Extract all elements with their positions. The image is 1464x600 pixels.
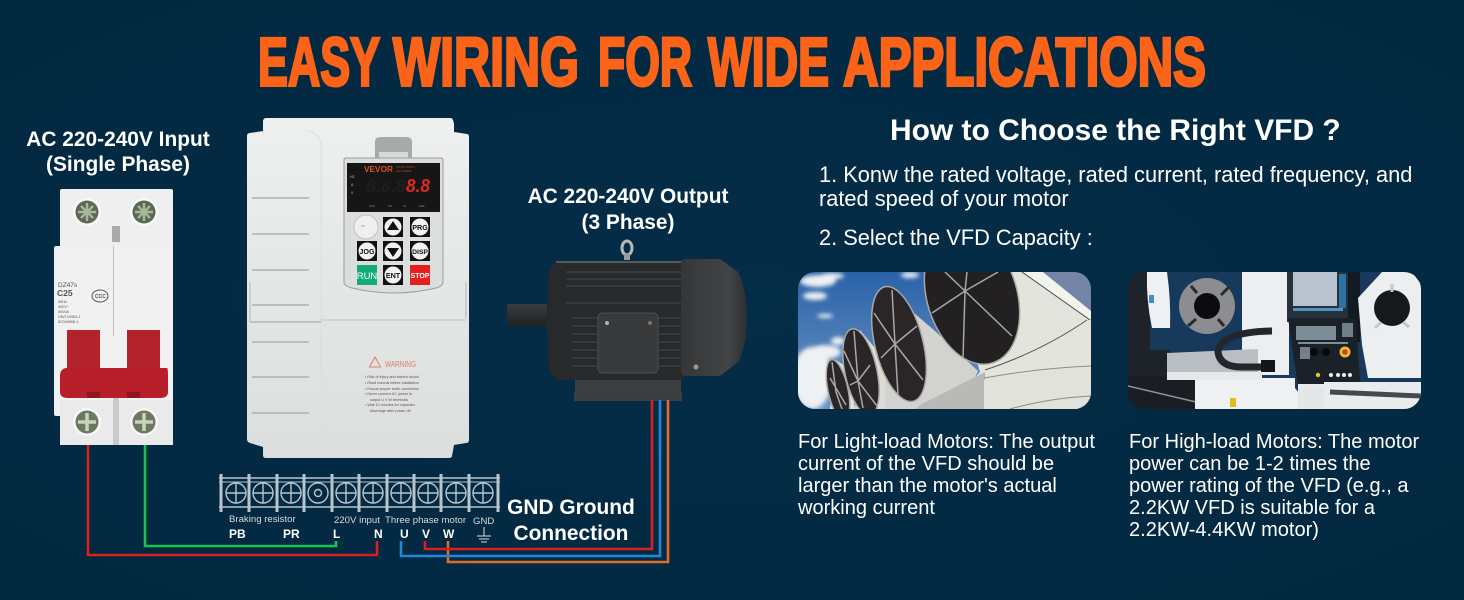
caption: high load: 2.2KW VFD is suitable for a [1129,497,1376,519]
VFD handle notch [375,137,412,158]
step 1 text: rated speed of your motor [819,186,1069,211]
motor eye bolt [622,241,632,260]
VFD button: ENT: ENT [386,271,401,280]
caption: high load: power rating of the VFD (e.g., a [1129,475,1409,497]
terminal labels: N [374,527,383,541]
caption: high load: power can be 1-2 times the [1129,453,1371,475]
VFD display: FW [388,204,393,208]
terminal labels [229,514,494,542]
title [258,24,1206,100]
terminal labels: U [400,527,409,541]
title: APPLICATIONS [843,24,1206,100]
output label: AC 220-240V Output [528,185,728,208]
fan openings [826,272,1020,409]
breaker label: C25 [57,288,73,298]
step 1 text: 1. Konw the rated voltage, rated current, rated frequency, and [819,162,1412,187]
title: EASY [258,24,380,100]
terminal labels: W [443,527,455,541]
lathe control keypad [1288,318,1362,388]
lathe chuck [1179,278,1235,334]
duct bodies [830,272,1091,409]
right steady rest [1358,272,1421,378]
wire: V red [425,400,652,549]
input label [26,128,210,176]
step 2 text: 2. Select the VFD Capacity : [819,225,1093,250]
photo: CNC lathe [1128,272,1421,409]
VFD display: TOUGH TOOLS, [396,165,416,169]
heading: how to choose: How to Choose the Right VFD ? [890,114,1341,147]
VFD display: 8.8.8 [366,177,407,196]
breaker top screws [73,198,158,226]
GND label [507,496,635,545]
VFD display: VEVOR [364,165,393,174]
VFD button: DISP: DISP [412,249,428,256]
GND label: GND Ground [507,496,635,519]
caption: high load: 2.2KW-4.4KW motor) [1129,519,1319,541]
breaker label: CCC [95,294,106,300]
wires [88,400,668,562]
output label [528,185,728,234]
ground symbol [477,527,491,542]
terminal labels: Braking resistor [229,514,296,525]
VFD warning label [365,357,419,413]
breaker label: 50Hz [58,300,67,304]
VFD button: PRG: PRG [412,223,428,232]
VFD display: 8.8 [406,176,430,196]
wire: U blue [401,400,660,556]
breaker label: DZ47s [58,282,78,289]
VFD knob [354,215,378,239]
caption: light load: larger than the motor's actual [798,475,1057,497]
caption: light load [797,431,1095,519]
breaker label: 400V~ [58,305,70,309]
photo: industrial fans [798,272,1091,409]
VFD button: JOG: JOG [359,247,375,256]
VFD warning label: • Risk of injury and electric shock [365,375,419,379]
breaker label: 6000A [58,310,69,314]
input label: AC 220-240V Input [26,128,210,151]
breaker bottom screws [73,408,158,436]
terminal labels: 220V input [334,515,380,526]
title: WIDE [708,24,829,100]
VFD control panel [344,158,443,293]
step 1 text [819,162,1412,211]
motor end cap [681,259,747,376]
terminal labels: V [422,527,430,541]
caption: light load: working current [797,497,935,519]
VFD button: down [383,241,403,261]
lathe screen [1293,272,1337,306]
VFD display: HZ [350,175,356,179]
output label: (3 Phase) [582,211,674,234]
caption: high load [1129,431,1420,541]
VFD display: LK [403,204,406,208]
terminal labels: L [333,527,340,541]
icon: electric motor [507,241,747,401]
VFD warning label: WARNING [385,360,416,369]
VFD button: STOP: STOP [411,273,430,280]
machine bed [1167,349,1258,372]
VFD button: up [383,217,403,237]
VFD display [347,163,440,212]
motor shaft [507,304,547,326]
caption: light load: For Light-load Motors: The output [798,431,1095,453]
icon: VFD drive [247,118,469,458]
terminal labels: PB [229,527,246,541]
caption: light load: current of the VFD should be [798,453,1054,475]
wire: N red [88,445,377,555]
terminal labels: GND [473,516,494,527]
VFD warning label: • Ensure proper earth connection [365,387,419,391]
terminal labels: Three phase motor [385,515,467,526]
title: FOR [598,24,692,100]
VFD warning label: • Read manual before installation [365,381,419,385]
breaker label: GB/T10963.1 [58,315,81,319]
breaker label: IEC60898-1 [58,320,78,324]
terminal block [219,474,500,512]
VFD display: V [351,191,354,195]
VFD display: RUN [369,204,375,208]
GND label: Connection [514,522,628,545]
VFD warning label: • Never connect AC power to [365,392,412,396]
wire: L green [145,445,336,546]
wire: W orange [448,400,668,562]
breaker red handle [60,330,168,398]
terminal labels: PR [283,527,300,541]
VFD display: ERR [419,204,425,208]
breaker label [57,282,108,324]
VFD display: HALF PRICE [396,169,412,173]
VFD warning label: discharge after power off [370,409,411,413]
VFD warning label: output U V W terminals [370,398,408,402]
icon: circuit breaker [54,189,173,445]
input label: (Single Phase) [46,153,190,176]
VFD warning label: • Wait 10 minutes for capacitor [365,403,416,407]
caption: high load: For High-load Motors: The motor [1129,431,1420,453]
motor terminal box [598,313,658,373]
title: WIRING [393,24,579,100]
VFD button: RUN: RUN [357,271,377,282]
VFD display: A [351,183,354,187]
